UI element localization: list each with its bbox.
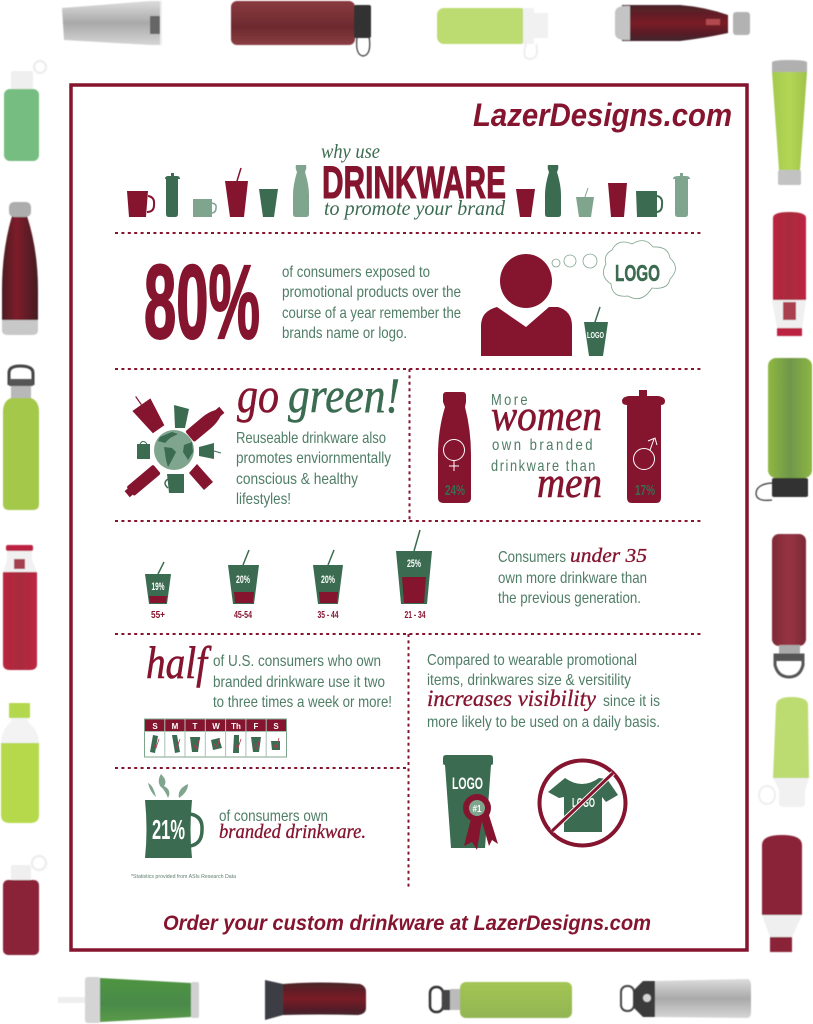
icon: globe ringed with drinkware xyxy=(123,390,226,499)
icon: steaming mug 21 percent xyxy=(145,774,202,858)
text block: consumers under 35: under 35 xyxy=(570,545,647,567)
chart: cup 55+: 55+ xyxy=(151,610,165,621)
bottle photo: right maroon bottle with handle xyxy=(772,534,806,677)
calendar: week of drinkware use: W xyxy=(212,722,220,731)
bottle photo: bottom green tumbler xyxy=(58,977,199,1023)
bottle photo: right maroon glass bottle xyxy=(762,835,802,952)
text block: half description xyxy=(213,653,392,711)
text block: half description: to three times a week or more! xyxy=(213,694,392,711)
heading: half: half xyxy=(146,637,212,688)
text block: 80 percent description xyxy=(282,264,461,342)
calendar: week of drinkware use: S xyxy=(152,722,158,731)
text block: more women than men: women xyxy=(491,393,602,440)
text block: 80 percent description: brands name or logo. xyxy=(282,325,407,342)
bottle photo: bottom lime bottle with handle xyxy=(430,982,572,1018)
calendar: week of drinkware use: F xyxy=(254,722,259,731)
stat: 80 percent: 80% xyxy=(144,244,260,361)
bottle photo: right lime silicone bottle xyxy=(759,697,809,807)
dotted dividers xyxy=(115,233,702,888)
heading: go green xyxy=(237,367,400,423)
bottle photo: right green bottle xyxy=(756,358,812,500)
icon row: right drinkware xyxy=(516,165,690,217)
text block: wearable comparison: Compared to wearable promotional xyxy=(427,652,637,669)
title: why use xyxy=(321,141,380,163)
title: DRINKWARE xyxy=(322,157,506,208)
text block: consumers under 35: own more drinkware than xyxy=(498,570,647,587)
chart: cup 35-44 xyxy=(313,550,343,621)
icon row: left drinkware xyxy=(127,165,309,217)
calendar: week of drinkware use: S xyxy=(273,722,279,731)
icon: women's bottle 24 percent xyxy=(438,392,471,503)
text block: more women than men: own branded xyxy=(492,437,595,454)
text block: consumers under 35: the previous generation. xyxy=(498,590,641,607)
bottle photo: lime silicone bottle xyxy=(437,8,548,59)
chart: cup 45-54 xyxy=(228,550,259,621)
bottle photo: silver tumbler xyxy=(62,1,162,45)
text block: wearable comparison: increases visibility xyxy=(427,686,597,711)
bottle photo: red wide-mouth bottle xyxy=(231,1,371,56)
icon: crossed-out t-shirt xyxy=(540,760,626,846)
chart: cup 21-34: 25% xyxy=(407,558,421,570)
text block: more women than men xyxy=(491,392,602,507)
icon: logo tumbler with ribbon xyxy=(443,755,498,850)
icon: steaming mug 21 percent: 21% xyxy=(152,814,185,845)
bottle photo: left lime glass bottle xyxy=(1,703,39,823)
bottle photo: bottom silver bottle xyxy=(621,979,751,1018)
bottle photo: left dark red bottle xyxy=(2,202,38,335)
text block: go green description: conscious & healthy xyxy=(236,471,358,488)
icon: person thinking of logo xyxy=(481,241,676,356)
text block: branded drinkware ownership xyxy=(219,808,366,843)
text block: branded drinkware ownership: branded drinkware. xyxy=(219,821,366,843)
bottle photo: left green glass bottle xyxy=(4,61,46,161)
text block: more women than men: More xyxy=(491,392,530,409)
text block: consumers under 35: Consumers xyxy=(498,549,566,566)
brand heading: LazerDesigns.com xyxy=(473,97,732,133)
chart: cup 45-54: 20% xyxy=(236,574,250,586)
bottle photo: left maroon glass bottle xyxy=(3,856,46,955)
text block: more women than men: drinkware than xyxy=(491,458,597,475)
icon: logo tumbler with ribbon: #1 xyxy=(472,804,482,815)
icon: logo tumbler with ribbon: LOGO xyxy=(452,774,483,793)
chart: cup 45-54: 45-54 xyxy=(234,610,252,621)
chart: cup 21-34 xyxy=(396,530,432,621)
text block: wearable comparison: since it is xyxy=(603,693,660,710)
bottle photo: dark red insulated bottle xyxy=(615,5,750,41)
icon: logo cup xyxy=(584,307,608,356)
chart: cup 55+: 19% xyxy=(152,581,165,593)
calendar: week of drinkware use xyxy=(144,719,286,757)
bottle photo: right lime tumbler xyxy=(772,60,807,185)
chart: cup 35-44: 35 - 44 xyxy=(318,610,339,621)
calendar: week of drinkware use: M xyxy=(172,722,179,731)
text block: 80 percent description: of consumers exposed to xyxy=(282,264,430,281)
text block: more women than men: men xyxy=(537,460,602,507)
icon: men's bottle 17 percent: 17% xyxy=(635,482,655,499)
bottle photo: left lime bottle with handle xyxy=(3,366,39,510)
icon: men's bottle 17 percent xyxy=(622,390,665,503)
text block: go green description: lifestyles! xyxy=(236,491,291,508)
text block: consumers under 35 xyxy=(498,545,647,607)
calendar: week of drinkware use: T xyxy=(193,722,198,731)
text block: half description: of U.S. consumers who own xyxy=(213,653,381,670)
text block: go green description: Reuseable drinkware also xyxy=(236,430,386,447)
heading: go green: go xyxy=(237,367,279,423)
bottle photo: left red bottle xyxy=(3,545,37,670)
bottle photo: right red bottle xyxy=(772,212,806,336)
calendar: week of drinkware use: Th xyxy=(231,722,241,731)
icon: logo cup: LOGO xyxy=(587,331,604,340)
title: to promote your brand xyxy=(324,196,505,220)
text block: branded drinkware ownership: of consumers own xyxy=(219,808,328,825)
text block: 80 percent description: course of a year remember the xyxy=(282,305,461,322)
chart: cup 35-44: 20% xyxy=(321,574,335,586)
icon: crossed-out t-shirt: LOGO xyxy=(572,795,595,810)
text block: wearable comparison: more likely to be used on a daily basis. xyxy=(427,714,660,731)
call to action: Order your custom drinkware at LazerDesigns.com xyxy=(163,912,651,935)
bottle photo: bottom dark red travel mug xyxy=(265,980,366,1020)
text block: wearable comparison: items, drinkwares size & versitility xyxy=(427,672,631,689)
chart: cup 21-34: 21 - 34 xyxy=(404,610,426,621)
title xyxy=(321,141,506,220)
text block: wearable comparison xyxy=(427,652,660,731)
footnote: *Statistics provided from ASIs Research Data xyxy=(131,874,237,880)
text block: go green description xyxy=(236,430,391,508)
heading: go green: green! xyxy=(288,367,400,423)
text block: 80 percent description: promotional products over the xyxy=(282,284,461,301)
icon: person thinking of logo: LOGO xyxy=(615,260,660,286)
text block: half description: branded drinkware use it two xyxy=(213,674,385,691)
main frame xyxy=(71,85,747,950)
chart: cup 55+ xyxy=(145,562,171,621)
text block: go green description: promotes enviornmentally xyxy=(236,450,391,467)
icon: women's bottle 24 percent: 24% xyxy=(445,482,465,499)
